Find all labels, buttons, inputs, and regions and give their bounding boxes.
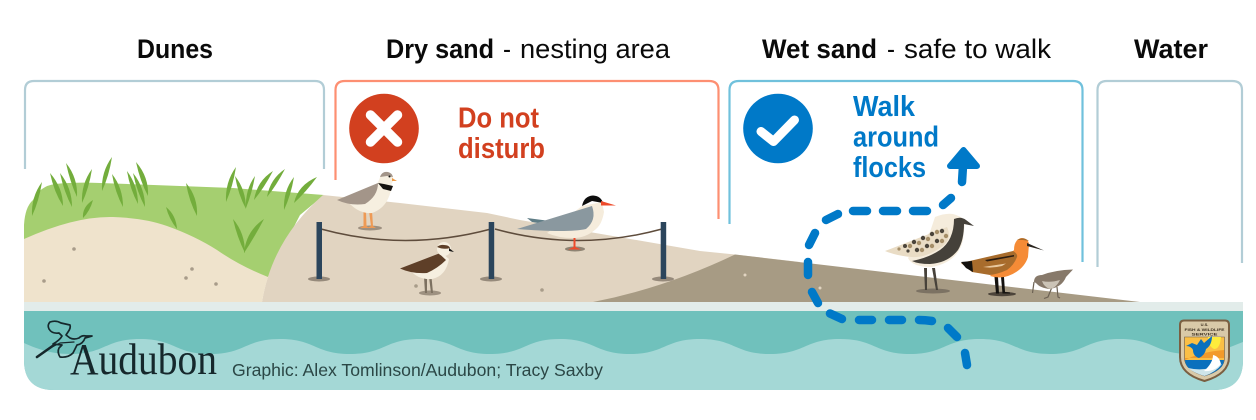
- heading: Dry sand - nesting area: Dry sand: [386, 34, 494, 64]
- grass blades: [32, 157, 317, 253]
- heading: Dry sand - nesting area: [386, 34, 670, 64]
- panel frame: dry sand: [336, 81, 718, 219]
- logo: U.S. Fish and Wildlife Service shield: U.S.: [1201, 322, 1208, 327]
- heron mark: [37, 321, 92, 357]
- text: do not disturb: disturb: [458, 133, 545, 165]
- heading: Water: Water: [1134, 34, 1208, 64]
- footer band: [24, 302, 1243, 390]
- text: do not disturb: Do not: [458, 102, 539, 134]
- text: walk around flocks: Walk: [853, 91, 916, 123]
- logo: U.S. Fish and Wildlife Service shield: FISH & WILDLIFE: [1184, 327, 1225, 332]
- heading: Wet sand - safe to walk: [762, 34, 1052, 64]
- bird: snowy plover: [400, 242, 454, 296]
- icon: do not disturb cross: [349, 94, 419, 163]
- bird: piping plover: [337, 172, 397, 230]
- heading: Dry sand - nesting area: -: [503, 34, 511, 64]
- water dark: [24, 311, 1243, 390]
- bird: dunlin: [1032, 270, 1073, 298]
- water light waves: [24, 339, 1243, 390]
- panel frame: dunes: [25, 81, 324, 169]
- heading: Wet sand - safe to walk: -: [887, 34, 895, 64]
- sand specks: [42, 247, 821, 292]
- logo: U.S. Fish and Wildlife Service shield: [1180, 320, 1229, 381]
- bird: sanderling: [885, 214, 974, 294]
- logo: Audubon: [37, 321, 217, 384]
- wet sand: [593, 254, 1140, 302]
- bird: common tern: [517, 196, 616, 252]
- dashed route: [808, 166, 967, 365]
- credit text: Graphic: Alex Tomlinson/Audubon; Tracy Saxby: [232, 360, 603, 380]
- text: walk around flocks: around: [853, 122, 939, 154]
- wordmark: Audubon: [70, 335, 217, 384]
- panel frame: wet sand: [730, 81, 1082, 262]
- heading: Wet sand - safe to walk: Wet sand: [762, 34, 877, 64]
- wet edge strip: [24, 302, 1243, 312]
- dune sand: [24, 217, 268, 302]
- dune grass hill: [24, 183, 324, 277]
- text: do not disturb: [458, 102, 545, 165]
- heading: Dry sand - nesting area: nesting area: [520, 34, 670, 64]
- walking route arrow: [808, 150, 977, 365]
- arrow head: [950, 150, 977, 166]
- rope fence: [308, 222, 674, 282]
- dry sand: [262, 195, 800, 302]
- text: walk around flocks: [853, 91, 939, 184]
- beach scene: [24, 157, 1140, 302]
- text: walk around flocks: flocks: [853, 152, 926, 184]
- logo: U.S. Fish and Wildlife Service shield: SERVICE: [1192, 332, 1218, 336]
- heading: Dunes: Dunes: [137, 34, 213, 64]
- heading: Wet sand - safe to walk: safe to walk: [904, 34, 1052, 64]
- panel frame: water: [1098, 81, 1242, 267]
- bird: red knot: [961, 238, 1044, 296]
- icon: safe check mark: [743, 94, 813, 163]
